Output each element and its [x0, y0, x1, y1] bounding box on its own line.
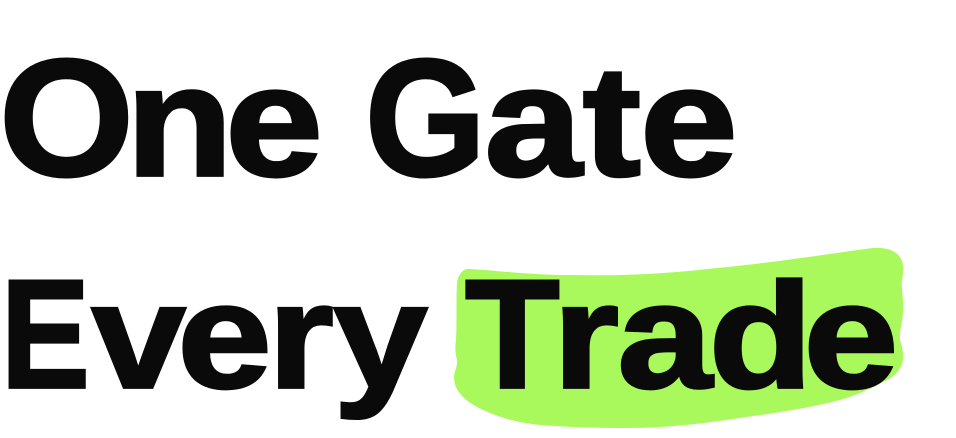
heading line 1: One Gate: ne — [126, 34, 323, 209]
heading line 1: One Gate: ate — [484, 34, 738, 209]
heading line 2: Every Trade: E — [1, 247, 90, 421]
heading line 2: Every Trade: T — [465, 248, 560, 420]
heading line 2: Every Trade: very — [92, 252, 428, 419]
heading line 1: One Gate: G — [365, 25, 486, 212]
highlight: green brush stroke behind Trade — [454, 248, 903, 428]
heading line 1: One Gate — [0, 25, 738, 212]
heading line 2: Every Trade — [1, 247, 898, 421]
heading line 2: Every Trade: rade — [553, 252, 898, 419]
heading line 1: One Gate: O — [0, 26, 134, 212]
